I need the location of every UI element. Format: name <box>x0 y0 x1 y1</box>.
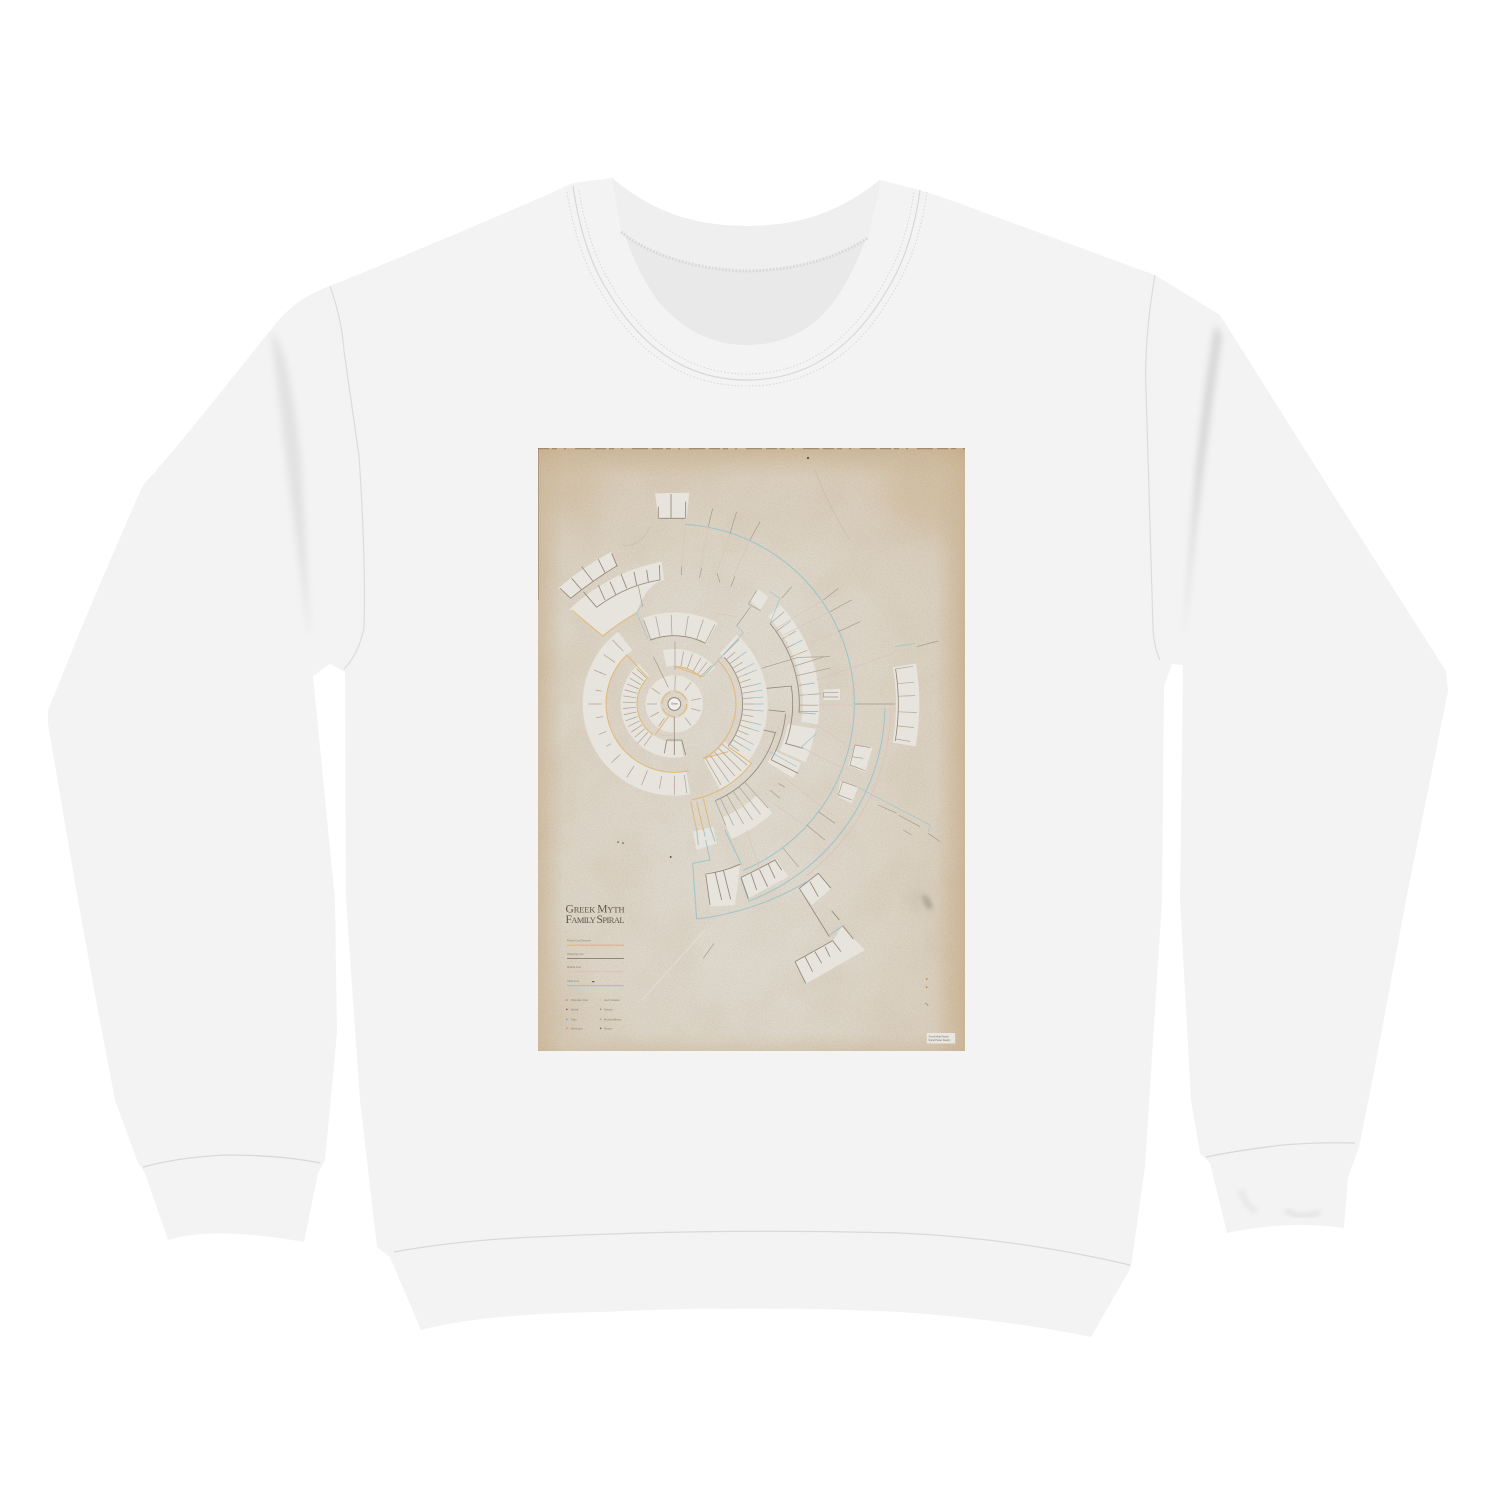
subtitle: FAMILY SPIRAL <box>566 914 624 926</box>
collar seams <box>567 186 927 386</box>
category legend: Muses <box>604 1026 613 1030</box>
connector lines <box>560 494 940 983</box>
marks near credit <box>925 978 928 1006</box>
innermost ring names: Chaos <box>671 704 679 706</box>
mid-right band ticks <box>770 612 830 714</box>
line legend: Marital Line <box>567 965 581 969</box>
innermost ring names <box>647 676 701 737</box>
right band blue tips <box>739 651 764 751</box>
lower grey fan ticks <box>715 782 768 825</box>
descent arcs <box>606 524 899 902</box>
category legend: Nymph <box>604 1007 613 1011</box>
right band ticks <box>723 639 754 751</box>
category legend: God Creation <box>604 998 620 1002</box>
category legend: Demi-god <box>571 1026 583 1030</box>
credit label: Spiral Poster Design <box>928 1039 951 1042</box>
category legend: Titan <box>571 1017 577 1021</box>
category legend <box>566 998 622 1030</box>
category legend: Monster/Beast <box>604 1017 622 1021</box>
back collar rib <box>612 178 880 271</box>
cuff and hem seams <box>143 1143 1355 1265</box>
inner top ring <box>681 651 711 677</box>
far right band ticks <box>896 666 917 741</box>
sweatshirt <box>48 178 1448 1337</box>
grey arcs <box>724 657 743 746</box>
orange arcs <box>636 678 654 735</box>
top band ticks <box>644 615 715 643</box>
credit label: Greek Myth Family <box>928 1036 949 1038</box>
family spiral diagram <box>558 492 940 984</box>
orange fan ticks <box>706 744 747 785</box>
line legend <box>567 938 624 986</box>
inner neck <box>612 178 880 345</box>
sleeve fold shadows <box>271 325 1320 1216</box>
paper background <box>535 440 970 1055</box>
name ticks <box>588 612 917 825</box>
centre rings <box>668 698 681 710</box>
title: GREEK MYTH <box>566 904 624 916</box>
mid-right blue tips <box>783 621 816 714</box>
line legend: Primal God Descent <box>567 938 591 942</box>
line legend: Affair Line <box>567 979 580 983</box>
category legend: Olympian God <box>571 998 588 1002</box>
shoulder seams <box>330 275 1160 669</box>
back neck seam <box>621 232 868 271</box>
outer left band ticks <box>588 640 687 795</box>
inner left ring <box>623 669 652 746</box>
yellow tips <box>740 635 808 806</box>
sweatshirt silhouette <box>48 178 1448 1337</box>
line legend: Offspring Line <box>567 952 584 956</box>
blue and pink arcs <box>685 524 855 871</box>
credit label <box>927 1033 955 1044</box>
category legend: Mortal <box>571 1007 579 1011</box>
pink tips on inner bands <box>595 672 674 787</box>
pale name bands <box>558 492 920 984</box>
poster <box>538 448 965 1051</box>
